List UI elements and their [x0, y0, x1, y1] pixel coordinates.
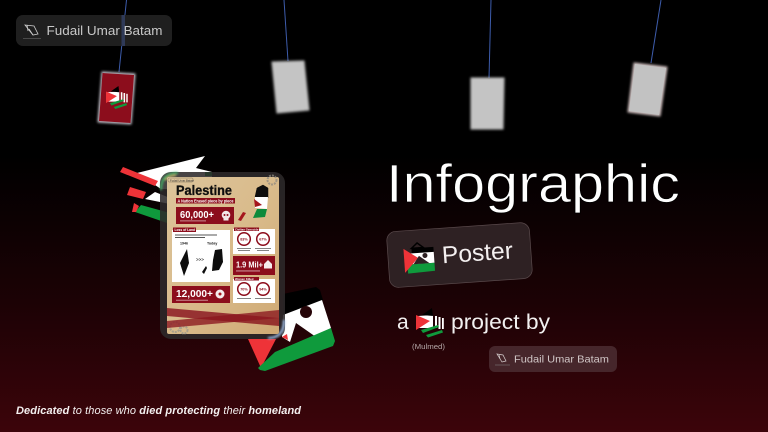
gaza shape: [238, 212, 246, 221]
hanging card 3: [471, 0, 504, 129]
stat 12,000+: [172, 286, 230, 303]
rim glow bottom right: [268, 320, 284, 338]
map flag: [253, 185, 268, 218]
land panel: 1946: [180, 242, 188, 246]
right panel top: Civilian Genocide: [235, 228, 259, 232]
gear bottom left: [170, 322, 188, 334]
rim glow top left: [161, 173, 178, 190]
hanging card 2: [272, 0, 309, 113]
right panel bottom: 94%: [259, 288, 267, 292]
stat 1.9 Mil+: [233, 256, 275, 275]
stat 60,000+: 60,000+: [180, 210, 214, 221]
hanging card 1 with logo: [98, 0, 135, 124]
land panel: Today: [207, 242, 217, 246]
stat 1.9 Mil+: 1.9 Mil+: [236, 260, 263, 270]
tablet with poster: [160, 172, 285, 339]
land panel: [172, 228, 230, 282]
Mulmed caption: (Mulmed): [412, 344, 445, 351]
right panel bottom: Women Killed: [235, 277, 254, 281]
poster badge: [386, 222, 533, 288]
stat 60,000+: [176, 207, 234, 224]
right panel top: [233, 228, 275, 254]
poster title: Palestine: [176, 183, 232, 198]
stat 12,000+: 12,000+: [176, 289, 213, 300]
author badge bottom: [489, 346, 617, 372]
right panel top: 67%: [259, 238, 267, 242]
decorative flag behind tablet: [120, 156, 212, 224]
author badge bottom: Fudail Umar Batam: [514, 354, 609, 366]
subtitle ribbon: A Nation Erased piece by piece: [178, 198, 234, 204]
main title: Infographic: [386, 154, 680, 214]
project by line: project by: [451, 311, 551, 334]
land panel: Loss of Land: [174, 228, 195, 232]
icon: poster: [403, 242, 435, 274]
hanging card 4: [628, 0, 667, 116]
decorative poster icon behind tablet: [248, 287, 335, 371]
dedication: Dedicated to those who died protecting their homeland: [16, 405, 301, 417]
icon: pen: [23, 25, 41, 38]
author badge top: Fudail Umar Batam: [46, 24, 162, 38]
gear top right: [268, 176, 276, 184]
crossing red ribbons: [167, 308, 279, 328]
right panel top: 83%: [240, 238, 248, 242]
poster badge: Poster: [441, 237, 514, 269]
right panel bottom: 70%: [240, 288, 248, 292]
right panel bottom: [233, 277, 275, 303]
poster page: [167, 176, 279, 334]
land panel: >>>: [196, 257, 204, 262]
author tag: Fudail Umar Batam: [170, 178, 195, 182]
project by line: [397, 308, 551, 338]
author badge top: [16, 15, 172, 46]
project by line: a: [397, 311, 409, 334]
icon: Mulmed logo: [416, 308, 444, 338]
